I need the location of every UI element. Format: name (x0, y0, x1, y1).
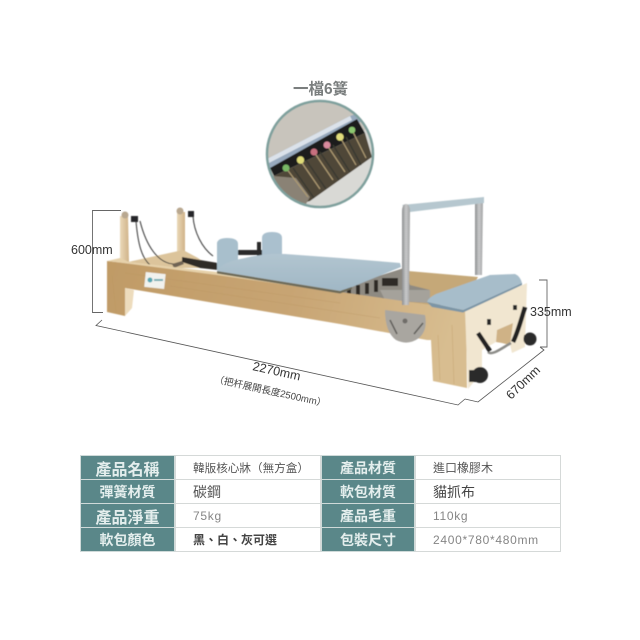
dimension: 2270mm length (96, 320, 465, 410)
specification table (80, 455, 561, 552)
box pad (427, 274, 522, 312)
row 1 label: 產品材質 (321, 455, 415, 480)
dimension: 2270mm length: 2270mm (251, 359, 302, 383)
row 4 label: 包裝尺寸 (321, 527, 415, 552)
row 2 value (415, 479, 561, 504)
row 4 value: 黑、白、灰可選 (193, 533, 277, 547)
row 1 label: 產品名稱 (80, 455, 175, 480)
logo label (144, 272, 166, 289)
row 2 label: 彈簧材質 (80, 479, 175, 504)
row 2 label: 軟包材質: 軟包材質 (340, 484, 396, 500)
row 2 label: 彈簧材質: 彈簧材質 (100, 484, 156, 500)
carriage seat (217, 254, 401, 294)
pivot plate (385, 310, 426, 343)
dimension: 2270mm length: （把杆展開長度2500mm） (213, 373, 327, 410)
reformer diagram (72, 80, 571, 406)
spring well (340, 268, 430, 303)
row 2 value: 碳鋼 (193, 484, 221, 500)
row 3 value: 110kg (433, 508, 468, 522)
row 1 value (175, 455, 321, 480)
reformer machine (107, 197, 536, 389)
row 4 label: 軟包顏色 (80, 527, 175, 552)
dimension: 335mm height (530, 280, 572, 347)
row 3 label: 產品淨重: 產品淨重 (95, 510, 160, 526)
row 3 label: 產品毛重: 產品毛重 (340, 508, 396, 524)
row 1 label: 產品材質: 產品材質 (340, 460, 396, 476)
row 2 value (175, 479, 321, 504)
foot bar bracket (172, 242, 264, 270)
row 3 value: 75kg (193, 508, 222, 522)
row 4 label: 包裝尺寸: 包裝尺寸 (340, 532, 396, 548)
row 1 label: 產品名稱: 產品名稱 (95, 462, 160, 478)
leg inner face (125, 288, 134, 316)
dimension: 670mm depth: 670mm (503, 363, 543, 402)
row 4 label: 軟包顏色: 軟包顏色 (100, 532, 156, 548)
dimension: 600mm height (71, 210, 121, 312)
knobs and wheels (469, 305, 536, 383)
row 3 value (175, 503, 321, 528)
row 1 value: 韓版核心牀（無方盒） (193, 462, 309, 474)
right cream end panel (465, 283, 527, 389)
left risers (120, 208, 213, 268)
row 3 label: 產品淨重 (80, 503, 175, 528)
row 2 value: 貓抓布 (433, 484, 475, 500)
row 4 value (415, 527, 561, 552)
row 3 label: 產品毛重 (321, 503, 415, 528)
dimension: 670mm depth (465, 347, 544, 402)
title: one-level six springs: 一檔6簧 (293, 79, 348, 98)
row 2 label: 軟包材質 (321, 479, 415, 504)
row 4 value: 2400*780*480mm (433, 532, 539, 546)
icon: spring detail magnifier (265, 100, 375, 210)
row 1 value: 進口橡膠木 (433, 461, 493, 475)
row 4 value (175, 527, 321, 552)
wood inner back (408, 271, 478, 305)
row 3 value (415, 503, 561, 528)
strap handle (478, 307, 525, 353)
shoulder rests (217, 232, 282, 270)
dimension: 335mm height: 335mm (530, 305, 572, 319)
dimension: 600mm height: 600mm (71, 243, 113, 257)
wooden frame side (107, 261, 467, 388)
handle bar (402, 197, 484, 305)
row 1 value (415, 455, 561, 480)
